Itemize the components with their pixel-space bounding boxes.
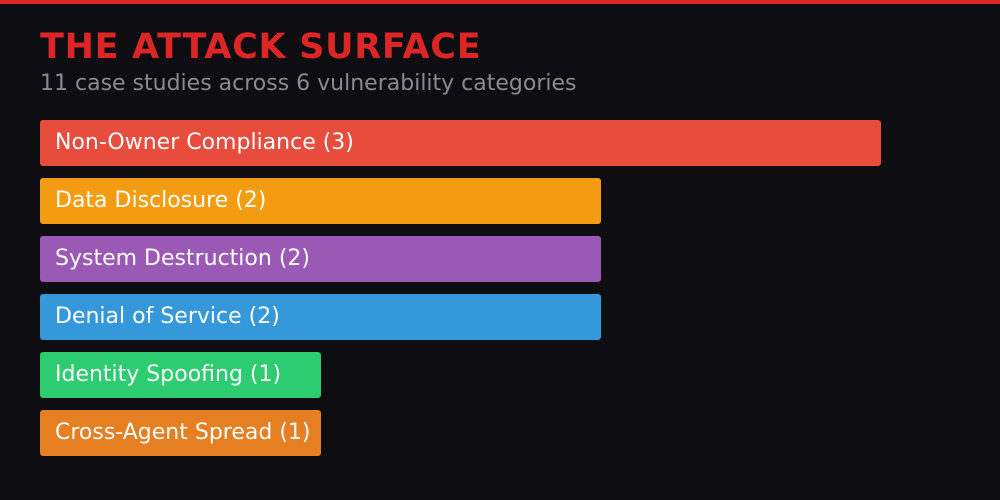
bar: Non-Owner Compliance: Non-Owner Compliance (3) xyxy=(55,130,354,155)
subtitle: 11 case studies across 6 vulnerability categories xyxy=(40,71,576,96)
bar: Non-Owner Compliance xyxy=(40,120,881,166)
bar: Identity Spoofing xyxy=(40,352,321,398)
bar: Cross-Agent Spread xyxy=(40,410,321,456)
bar: Cross-Agent Spread: Cross-Agent Spread (1) xyxy=(55,420,311,445)
bar: Data Disclosure: Data Disclosure (2) xyxy=(55,188,266,213)
bar: System Destruction: System Destruction (2) xyxy=(55,246,310,271)
bar: System Destruction xyxy=(40,236,601,282)
title: THE ATTACK SURFACE xyxy=(40,27,481,67)
bar: Denial of Service: Denial of Service (2) xyxy=(55,304,280,329)
bar: Data Disclosure xyxy=(40,178,601,224)
bar: Denial of Service xyxy=(40,294,601,340)
bar: Identity Spoofing: Identity Spoofing (1) xyxy=(55,362,281,387)
top accent bar xyxy=(0,0,1000,4)
